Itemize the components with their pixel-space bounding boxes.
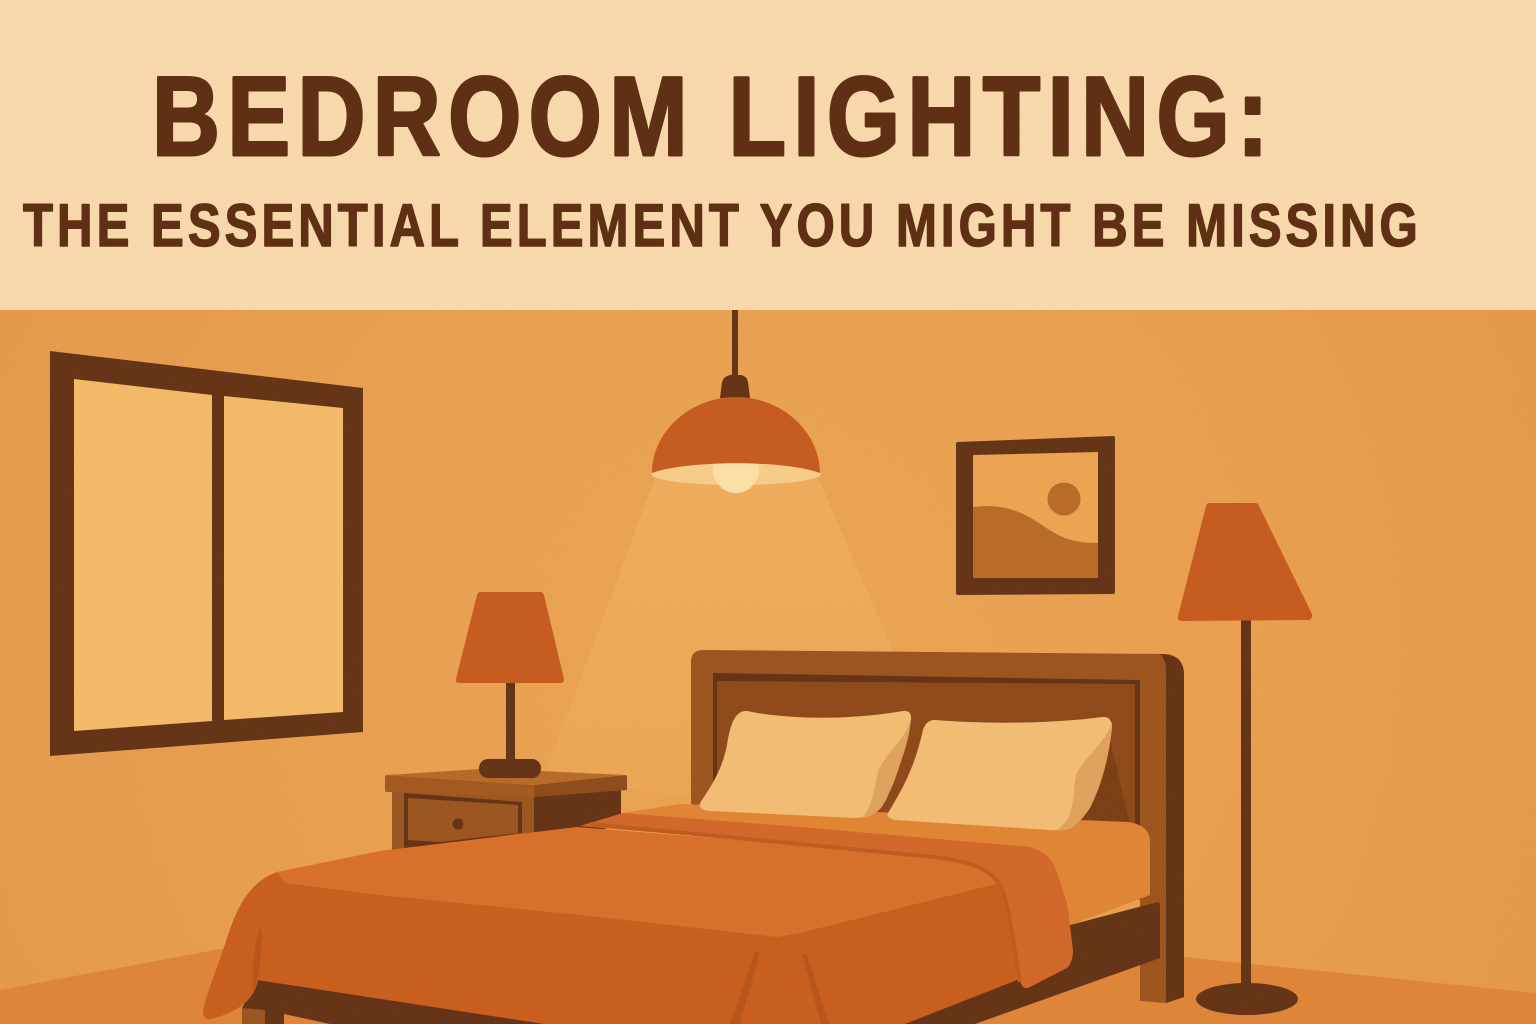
nightstand [385, 769, 627, 852]
nightstand side [534, 790, 621, 845]
nightstand top slab side [534, 775, 627, 797]
window [50, 351, 363, 756]
pendant shade [652, 397, 820, 473]
drape fold centre [730, 952, 760, 1024]
picture sky [973, 452, 1098, 578]
title: BEDROOM LIGHTING: [152, 53, 1268, 179]
picture frame [956, 436, 1115, 595]
floor lamp base [1196, 983, 1298, 1015]
floor lamp pole [1241, 618, 1251, 993]
window frame [50, 351, 363, 756]
pendant cable [732, 310, 738, 378]
drawer face [408, 798, 518, 842]
headboard panel fill [717, 681, 1135, 830]
fold seam [590, 824, 1020, 982]
wall [0, 310, 1536, 1024]
bed [203, 650, 1184, 1024]
pendant lamp [651, 310, 821, 493]
nightstand top surface [387, 769, 625, 785]
front frame rail [242, 980, 545, 1024]
nightstand top slab front [385, 775, 534, 797]
headboard [691, 650, 1184, 1003]
light cone [545, 478, 895, 800]
floor lamp shade [1178, 503, 1312, 621]
side rail [900, 902, 1160, 1024]
table lamp shade [456, 592, 564, 683]
drape fold right [802, 953, 829, 1024]
table lamp [456, 592, 564, 778]
pendant cap [720, 375, 750, 398]
right pillow shade [1056, 722, 1112, 830]
left pillow [700, 711, 911, 818]
headboard inner panel [713, 673, 1140, 830]
framed picture [956, 436, 1115, 595]
front frame leg [242, 1007, 266, 1024]
header band [0, 0, 1536, 310]
lit underside [651, 463, 821, 485]
picture hill [973, 506, 1098, 578]
picture sun [1048, 482, 1080, 516]
floor lamp [1178, 503, 1312, 1015]
sheet [623, 804, 1150, 926]
headboard dark side [1160, 654, 1184, 1003]
left pillow shade [862, 718, 911, 818]
panel shadow [1080, 740, 1130, 824]
window right pane [224, 396, 343, 720]
subtitle: THE ESSENTIAL ELEMENT YOU MIGHT BE MISSING [23, 191, 1418, 259]
nightstand body [392, 790, 534, 852]
drawer knob [452, 818, 464, 830]
blanket drape [203, 850, 1022, 1024]
right pillow [888, 717, 1112, 830]
blanket fold [580, 813, 1073, 988]
floor [0, 940, 1536, 1024]
bulb [713, 447, 759, 493]
table lamp base [479, 759, 541, 778]
window left pane [74, 379, 212, 731]
drape fold left [253, 925, 261, 994]
drawer frame [404, 793, 522, 850]
blanket top surface [277, 827, 1000, 937]
table lamp pole [506, 682, 515, 762]
